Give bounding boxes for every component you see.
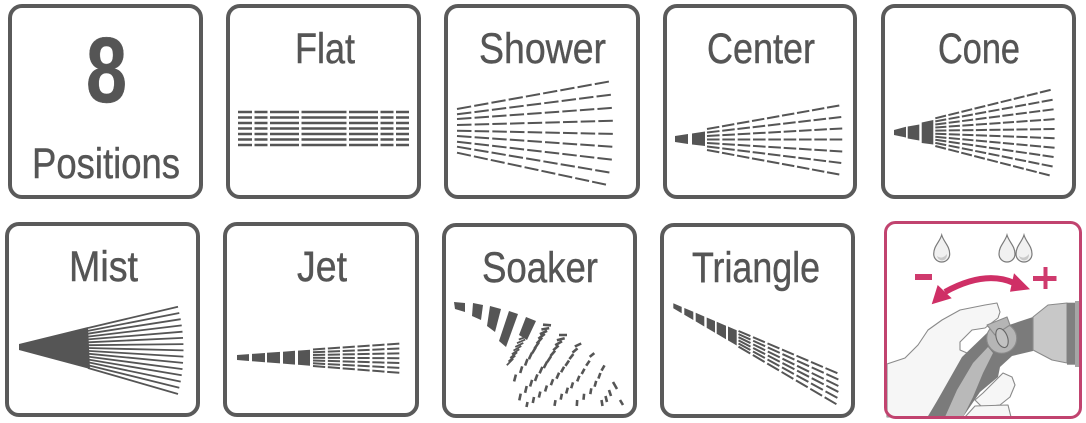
panel: center: [665, 6, 855, 197]
panel: flow control: [886, 222, 1081, 418]
spray: cone: [894, 89, 1057, 176]
icon: one water drop: [934, 235, 950, 262]
icon: minus: [915, 274, 932, 280]
spray: center: [675, 105, 845, 175]
spray: soaker: [454, 302, 623, 407]
heading: 8: 8: [86, 18, 127, 122]
heading: Center: Center: [707, 25, 815, 73]
panel: flat: [228, 6, 419, 197]
panel: shower: [446, 6, 638, 197]
heading: Triangle: Triangle: [692, 244, 820, 292]
panel: jet: [225, 224, 417, 415]
icon: two water drops: [999, 235, 1032, 262]
heading: Soaker: Soaker: [482, 244, 598, 292]
spray: triangle: [673, 303, 841, 406]
heading: Flat: Flat: [295, 25, 355, 73]
heading: Mist: Mist: [69, 243, 138, 291]
panel: soaker: [444, 225, 635, 416]
heading: Shower: Shower: [479, 25, 606, 73]
panel: triangle: [662, 225, 853, 416]
label: Positions: Positions: [32, 140, 180, 188]
panel: 8 positions: [10, 6, 201, 197]
spray: flat: [238, 112, 409, 145]
heading: Jet: Jet: [297, 243, 347, 291]
spray: jet: [237, 344, 402, 373]
icon: plus: [1033, 267, 1056, 289]
panel: mist: [7, 224, 198, 415]
icon: hand holding nozzle: [887, 301, 1081, 417]
spray: shower: [457, 81, 616, 185]
panel: cone: [883, 6, 1074, 197]
heading: Cone: Cone: [938, 25, 1020, 73]
arrow: double-headed curved: [932, 273, 1030, 304]
spray: mist: [19, 307, 184, 394]
